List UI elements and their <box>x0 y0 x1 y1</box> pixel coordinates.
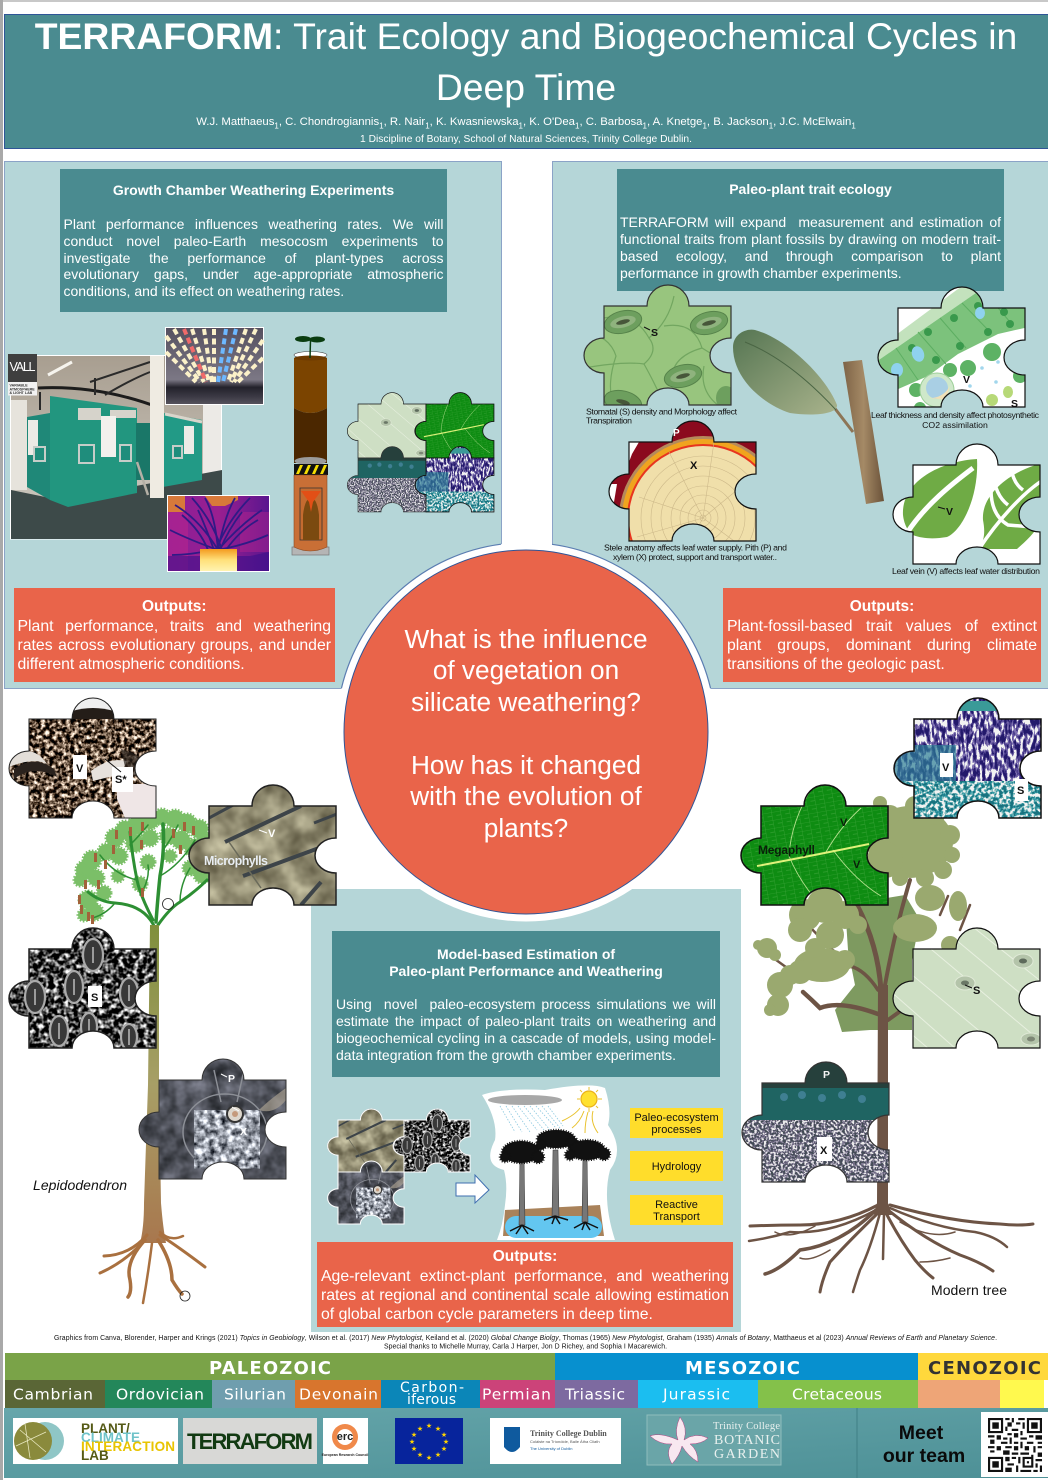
central question circle: silicate weathering? <box>411 687 641 717</box>
panel: model-based estimation <box>311 889 741 1332</box>
logo: EU flag: ★ <box>411 1445 417 1453</box>
caption: stele: Stele anatomy affects leaf water supply. Pith (P) and <box>604 542 787 552</box>
trunk: modern tree <box>874 985 892 1215</box>
text block: paleo-plant trait ecology: performance in growth chamber experiments. <box>620 265 902 281</box>
text block: model-based estimation <box>336 996 716 1063</box>
puzzle: wood section: X <box>820 1145 828 1157</box>
outputs text: model-based estimation: Outputs: <box>493 1248 557 1264</box>
ecosystem illustration <box>482 1085 617 1240</box>
credits <box>54 1335 997 1350</box>
outputs text: growth chamber: Plant performance, traits and weathering <box>18 618 331 635</box>
authors: W.J. Matthaeus1, C. Chondrogiannis1, R. Nair1, K. Kwasniewska1, K. O'Dea1, C. Barbosa1, A. Knetge1, B. Jackson1, J.C. McElwain1 <box>196 116 856 130</box>
header banner <box>4 14 1048 149</box>
credits: Special thanks to Michelle Murray, Carla J Harper, Jon D Richey, and Sophia I Macarewich. <box>384 1344 667 1350</box>
roots: Lepidodendron <box>100 1232 205 1303</box>
text block: paleo-plant trait ecology: functional traits from plant fossils by drawing on modern trait- <box>620 231 1001 247</box>
central question circle: with the evolution of <box>409 781 642 811</box>
Lepidodendron tree <box>74 809 212 1303</box>
model box: paleo-ecosystem processes: processes <box>651 1124 702 1136</box>
LED ceiling photo <box>165 327 264 405</box>
logo: EU flag: ★ <box>417 1425 423 1433</box>
puzzle: stele fossil: X <box>240 1126 247 1138</box>
VALL logo: ATMOSPHERE <box>10 387 35 391</box>
geologic timeline <box>5 1353 1048 1408</box>
logo: ERC <box>322 1418 368 1464</box>
period bars: Cretaceous <box>792 1386 882 1404</box>
logo: Plant Climate Interaction Lab <box>13 1418 178 1464</box>
model box: hydrology <box>630 1151 723 1181</box>
outputs text: growth chamber: different atmospheric conditions. <box>18 656 245 673</box>
foliage: dark crown <box>835 895 920 1032</box>
puzzle: stele anatomy: X <box>690 460 698 472</box>
puzzle: leaf anatomy section <box>889 694 1048 844</box>
soil column mesocosm <box>292 336 329 555</box>
period bars: Permian <box>482 1386 551 1404</box>
puzzle: Megaphyll: Megaphyll <box>758 843 815 857</box>
puzzle: leaf cross section <box>877 286 1026 408</box>
title: TERRAFORM: Trait Ecology and Biogeochemical Cycles in <box>35 15 1017 57</box>
outputs text: paleo-plant <box>727 598 1037 673</box>
period bars: Triassic <box>564 1386 625 1404</box>
puzzle: leaf epidermis stomata: S <box>973 985 980 997</box>
outputs text: model-based estimation: rates at regional and continental scale allowing estimation <box>321 1286 729 1304</box>
species label: Lepidodendron: Lepidodendron <box>33 1177 127 1193</box>
period bars: Devonain <box>299 1386 378 1404</box>
era bars: CENOZOIC <box>928 1358 1041 1379</box>
logo: EU flag: ★ <box>411 1431 417 1439</box>
text block: growth chamber: evolutionary gaps, under age-appropriate atmospheric <box>64 266 444 282</box>
panel: growth chamber experiments <box>4 161 502 689</box>
outputs text: paleo-plant: plant groups, dominant during climate <box>727 637 1037 654</box>
logo: EU flag: ★ <box>426 1454 432 1462</box>
model box: reactive transport: Transport <box>653 1211 700 1223</box>
puzzle collage: growth chamber <box>345 390 509 526</box>
era bars: PALEOZOIC <box>209 1358 331 1379</box>
logo: Trinity College Dublin: The University of Dublin <box>530 1446 572 1451</box>
puzzle: leaf anatomy section: S <box>1017 785 1024 797</box>
puzzle: Megaphyll: V <box>840 817 848 829</box>
puzzle: fossil vein and stomata: S* <box>115 774 127 786</box>
puzzle: stomata fossil: S <box>91 992 98 1004</box>
period bars: Carbon- <box>400 1380 464 1396</box>
outputs text: growth chamber: Outputs: <box>142 598 207 615</box>
text: meet our team <box>883 1422 965 1467</box>
logo: EU flag: ★ <box>443 1438 449 1446</box>
text block: model-based estimation: estimate the impact of paleo-plant traits on weathering and <box>336 1012 716 1028</box>
text block: growth chamber: conditions, and its effect on weathering rates. <box>64 283 344 299</box>
VALL logo: VARIABLE <box>10 384 28 388</box>
model box: reactive transport <box>630 1195 723 1225</box>
period bars: Silurian <box>224 1386 286 1404</box>
text block: model-based estimation: biogeochemical cycling in a cascade of models, using model- <box>336 1030 716 1046</box>
caption: stomata: Stomatal (S) density and Morphology affect <box>586 406 738 416</box>
thermal image photo <box>167 495 270 572</box>
growth chamber photo <box>10 355 222 540</box>
logo: Plant Climate Interaction Lab: LAB <box>81 1448 109 1463</box>
logo: ERC: European Research Council <box>322 1453 368 1457</box>
text block: paleo-plant trait ecology: TERRAFORM will expand measurement and estimation of <box>620 214 1001 230</box>
outputs text: growth chamber <box>18 598 331 673</box>
text block: paleo-plant trait ecology: based ecology, and through comparison to plant <box>620 248 1001 264</box>
text box: paleo-plant trait ecology <box>617 169 1004 291</box>
caption: stomata second line: Transpiration <box>586 416 632 426</box>
puzzle: stele anatomy: P <box>673 428 680 439</box>
sun <box>562 1087 602 1133</box>
puzzle: leaf venation: V <box>946 506 953 518</box>
logo: EU flag: ★ <box>441 1431 447 1439</box>
puzzle: leaf anatomy section: V <box>942 762 950 774</box>
period bars: Ordovician <box>116 1386 204 1404</box>
branches: Lepidodendron crown <box>88 824 207 928</box>
outputs text: model-based estimation <box>321 1248 729 1322</box>
puzzle: stomata illustration: S <box>651 327 658 339</box>
outputs text: model-based estimation: of global carbon cycle parameters in deep time. <box>321 1306 653 1322</box>
outputs: model-based estimation <box>317 1242 733 1327</box>
logo: TERRAFORM: TERRAFORM <box>187 1429 313 1454</box>
model box: paleo-ecosystem processes: Paleo-ecosystem <box>634 1112 719 1124</box>
text block: growth chamber: conduct novel paleo-Earth mesocosm experiments to <box>64 233 444 249</box>
panel: paleo-plant trait ecology <box>552 161 1048 689</box>
puzzle collage: model inputs <box>325 1107 485 1238</box>
foliage: light crown <box>753 796 967 1016</box>
icon: leaf on stem <box>733 330 884 504</box>
QR code <box>981 1412 1048 1477</box>
roots: modern tree <box>749 1205 1033 1292</box>
era bars <box>5 1353 1048 1380</box>
title <box>35 15 1017 108</box>
puzzle: fossil vein and stomata <box>8 698 156 818</box>
outputs text: growth chamber: rates across evolutionary groups, and under <box>18 637 331 654</box>
central question circle: plants? <box>484 813 568 843</box>
outputs text: paleo-plant: Outputs: <box>850 598 914 615</box>
puzzle: stele fossil <box>134 1055 314 1205</box>
outputs: paleo-plant <box>723 588 1041 682</box>
outputs: growth chamber <box>14 588 335 682</box>
text: meet our team: our team <box>883 1445 965 1467</box>
text: meet our team: Meet <box>899 1422 944 1444</box>
model box: paleo-ecosystem processes <box>630 1108 723 1138</box>
logo: Plant Climate Interaction Lab: INTERACTION <box>81 1439 175 1454</box>
text block: model-based estimation: Using novel paleo-ecosystem process simulations we will <box>336 996 716 1012</box>
puzzle: stomata illustration <box>583 284 732 406</box>
model box: hydrology: Hydrology <box>652 1161 702 1173</box>
era bars: MESOZOIC <box>685 1358 800 1379</box>
logo: ERC: erc <box>337 1431 353 1443</box>
puzzle: Microphylls: V <box>268 828 276 840</box>
text block: growth chamber: investigate the performance of plant-types across <box>64 250 444 266</box>
model box: reactive transport: Reactive <box>655 1199 698 1211</box>
caption: stele second line: xylem (X) protect, support and transport water.. <box>613 552 777 562</box>
heading: model-based estimation: Model-based Estimation of <box>437 946 615 962</box>
outputs text: paleo-plant: Plant-fossil-based trait values of extinct <box>727 618 1037 635</box>
puzzle: Megaphyll: V <box>853 859 861 871</box>
puzzle: leaf cross section: V <box>963 374 970 386</box>
text block: paleo-plant trait ecology <box>620 214 1002 281</box>
foliage: Lepidodendron crown <box>74 809 212 921</box>
VALL logo: & LIGHT LAB <box>10 391 33 395</box>
text block: growth chamber <box>64 216 444 299</box>
logo: EU flag: ★ <box>435 1451 441 1459</box>
puzzle: stomata fossil <box>4 924 184 1074</box>
question circle halo <box>336 542 716 922</box>
logo: Plant Climate Interaction Lab: CLIMATE <box>81 1430 140 1445</box>
logo: EU flag: ★ <box>426 1422 432 1430</box>
logo: Plant Climate Interaction Lab: PLANT/ <box>81 1421 130 1436</box>
affiliation: 1 Discipline of Botany, School of Natural Sciences, Trinity College Dublin. <box>360 134 692 145</box>
arrow <box>456 1175 489 1203</box>
caption: leaf vein: Leaf vein (V) affects leaf water distribution <box>892 566 1040 576</box>
logo: EU flag: ★ <box>409 1438 415 1446</box>
title: Deep Time <box>436 66 616 108</box>
logo: Botanic Garden <box>647 1415 781 1465</box>
heading: growth chamber: Growth Chamber Weathering Experiments <box>113 182 394 198</box>
text box: model-based estimation <box>332 931 720 1077</box>
species label: modern tree: Modern tree <box>931 1282 1007 1298</box>
puzzle: wood section <box>737 1058 917 1208</box>
puzzle: fossil vein and stomata: V <box>76 763 84 775</box>
trunk: Lepidodendron <box>140 925 166 1243</box>
outputs text: model-based estimation: Age-relevant extinct-plant performance, and weathering <box>321 1268 729 1284</box>
period bars: iferous <box>407 1392 456 1408</box>
heading: model-based estimation: Paleo-plant Performance and Weathering <box>389 963 663 979</box>
credits: Graphics from Canva, Blorender, Harper and Krings (2021) Topics in Geobiology, Wilson et al. (2017) New Phytologist, Keiland et al. (2020) Global Change Biolgy, Thomas (1965) New Phytologist, Graham (1935) Annals of Botany, Matthaeus et al (2023) Annual Reviews of Earth and Planetary Science. <box>54 1335 997 1342</box>
VALL logo <box>8 354 37 396</box>
puzzle: stele fossil: P <box>228 1073 235 1085</box>
period bars <box>5 1380 1044 1408</box>
puzzle: leaf epidermis stomata <box>888 924 1048 1074</box>
puzzle: Microphylls: Microphylls <box>204 854 268 868</box>
cones: Lepidodendron <box>78 822 195 924</box>
logo: Trinity College Dublin: Coláiste na Tríonóide, Baile Átha Cliath <box>530 1439 600 1444</box>
logo: EU flag <box>395 1418 463 1464</box>
period bars: Jurassic <box>662 1386 730 1404</box>
logo: EU flag: ★ <box>435 1425 441 1433</box>
branches: modern tree <box>772 880 970 1020</box>
puzzle: stele anatomy <box>608 420 757 542</box>
puzzle: Microphylls <box>184 781 364 931</box>
logo: Botanic Garden: Trinity College <box>713 1421 780 1432</box>
puzzle: leaf cross section: S <box>1011 398 1018 410</box>
VALL logo: VALL <box>10 360 36 374</box>
trees <box>500 1130 610 1234</box>
logo: EU flag: ★ <box>441 1445 447 1453</box>
logo band <box>4 1408 1048 1478</box>
caption: leaf thickness second line: CO2 assimilation <box>922 420 988 430</box>
logo: Trinity College Dublin: Trinity College Dublin <box>530 1429 607 1438</box>
period bars: Cambrian <box>13 1386 93 1404</box>
caption: leaf thickness: Leaf thickness and density affect photosynthetic <box>871 410 1040 420</box>
logo: EU flag: ★ <box>417 1451 423 1459</box>
logo: Botanic Garden: GARDEN <box>714 1447 780 1462</box>
puzzle: leaf venation <box>892 443 1041 565</box>
puzzle: wood section: P <box>823 1069 830 1081</box>
text block: model-based estimation: data integration from the growth chamber experiments. <box>336 1046 676 1062</box>
logo: TERRAFORM <box>183 1418 317 1464</box>
cloud and rain <box>488 1095 563 1132</box>
logo: Trinity College Dublin <box>490 1418 621 1464</box>
central question circle: of vegetation on <box>433 655 619 685</box>
central question circle <box>344 550 708 914</box>
central question circle: How has it changed <box>411 750 641 780</box>
heading: model-based estimation <box>389 946 663 979</box>
heading: paleo-plant trait ecology: Paleo-plant trait ecology <box>729 181 892 197</box>
text block: growth chamber: Plant performance influences weathering rates. We will <box>64 216 444 232</box>
central question circle: What is the influence <box>404 624 648 654</box>
outputs text: paleo-plant: transitions of the geologic past. <box>727 656 945 673</box>
puzzle: Megaphyll <box>736 781 916 931</box>
logo: Botanic Garden: BOTANIC <box>714 1433 780 1448</box>
text box: growth chamber <box>60 169 447 312</box>
modern tree <box>749 796 1033 1292</box>
